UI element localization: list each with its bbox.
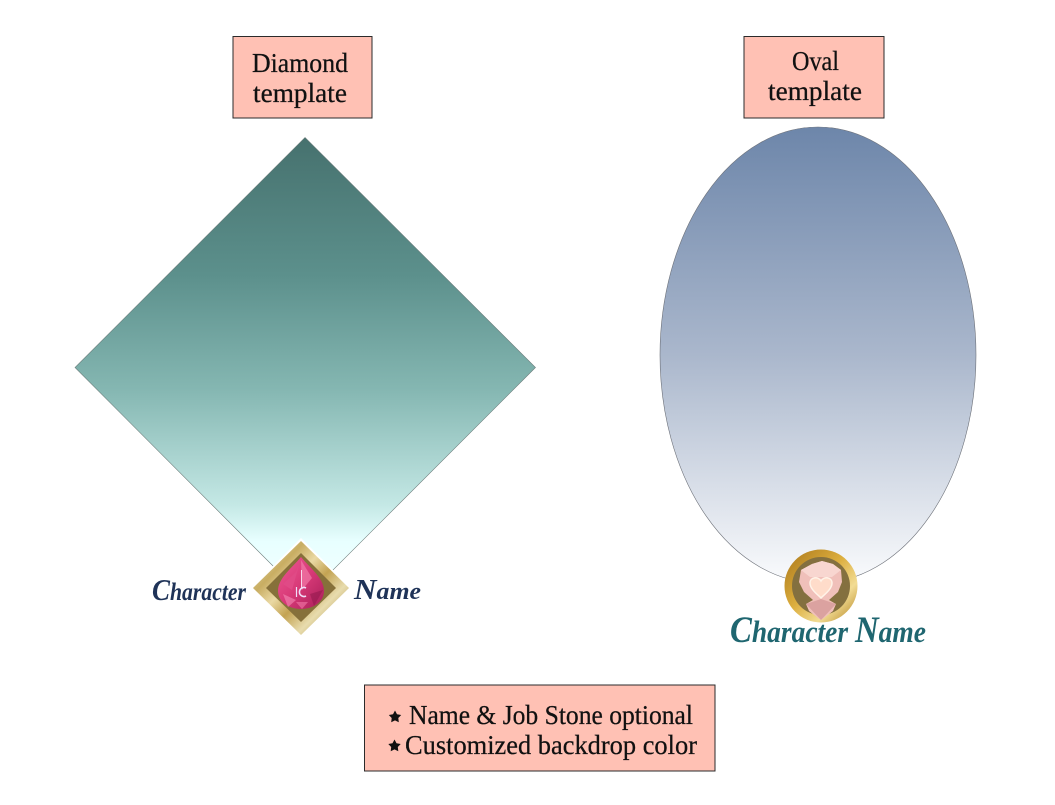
label: Diamond template	[233, 36, 372, 118]
label: Diamond template: Diamond	[252, 48, 348, 78]
label: Character Name, diamond: Character	[152, 572, 246, 607]
callout: options	[364, 685, 715, 771]
icon: rose crystal	[799, 561, 842, 620]
callout: options: Name & Job Stone optional	[409, 700, 693, 730]
oval backdrop	[660, 127, 976, 583]
label: Oval template: template	[768, 76, 862, 106]
icon: star bullet	[389, 710, 401, 722]
label: Diamond template: template	[253, 78, 347, 108]
icon: ruby gem	[278, 557, 324, 609]
icon: oval job stone	[784, 550, 858, 622]
label: Oval template	[744, 36, 884, 118]
label: Character Name, diamond	[152, 572, 421, 607]
icon: diamond job stone	[251, 538, 351, 637]
icon: star bullet	[388, 740, 401, 751]
label: Character Name, diamond: Name	[353, 574, 421, 606]
diamond backdrop	[75, 138, 536, 598]
callout: options: Customized backdrop color	[405, 730, 697, 760]
label: Character Name, oval: Character Name	[730, 610, 926, 651]
label: Oval template: Oval	[792, 46, 839, 76]
